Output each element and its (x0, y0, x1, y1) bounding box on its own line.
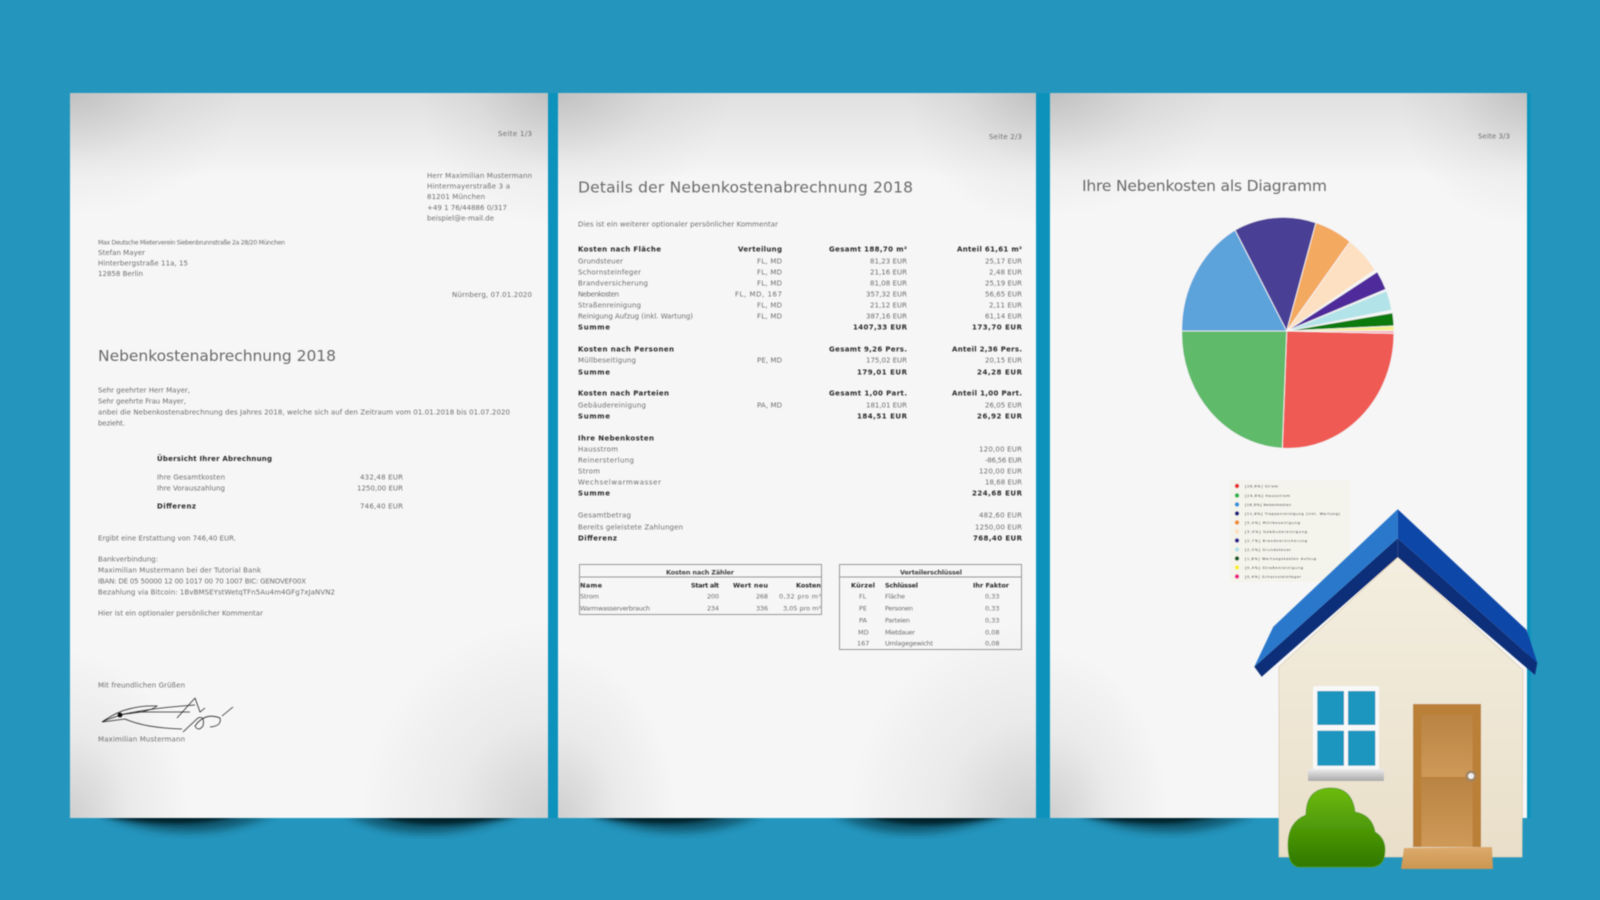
costs by area: Reinigung Aufzug (inkl. Wartung) (578, 312, 693, 320)
costs by parcels: Anteil 1,00 Part. (952, 390, 1022, 398)
your utility costs: 18,68 EUR (985, 478, 1022, 486)
door step (1401, 847, 1493, 869)
your utility costs: Hausstrom (578, 446, 618, 454)
legend: [1,8%] Wartungskosten Aufzug (1245, 557, 1316, 561)
table: costs by meter: 234 (707, 604, 719, 612)
bank details: Ergibt eine Erstattung von 746,40 EUR. (98, 534, 236, 542)
totals: 768,40 EUR (973, 534, 1023, 542)
costs by area: Anteil 61,61 m² (957, 246, 1022, 254)
costs by area: FL, MD, 167 (735, 290, 782, 298)
your utility costs: Strom (578, 468, 600, 476)
costs by area: Straßenreinigung (578, 302, 641, 310)
table: allocation key (839, 564, 1022, 650)
table: costs by meter: Kosten (796, 582, 821, 590)
door (1413, 704, 1481, 847)
your utility costs (578, 434, 1023, 498)
table: costs by meter: Wert neu (733, 582, 768, 590)
legend: [0,4%] Straßenreinigung (1245, 566, 1303, 570)
table: allocation key: 0,08 (985, 640, 999, 648)
costs by area: Schornsteinfeger (578, 268, 641, 276)
costs by parcels: Summe (578, 412, 610, 420)
panel: page 2 details (558, 93, 1036, 818)
your utility costs: 120,00 EUR (979, 468, 1022, 476)
table: costs by meter: Name (580, 582, 603, 590)
costs by area: 2,11 EUR (989, 302, 1022, 310)
sender address: 81201 München (427, 193, 485, 201)
table: allocation key: Ihr Faktor (973, 582, 1010, 590)
sender address: Herr Maximilian Mustermann (427, 172, 532, 180)
page number: Seite 3/3 (1478, 132, 1510, 140)
details title: Details der Nebenkostenabrechnung 2018 (578, 178, 913, 196)
your utility costs: Wechselwarmwasser (578, 478, 661, 486)
table: allocation key: Personen (885, 604, 913, 612)
costs by parcels: 26,05 EUR (985, 402, 1022, 410)
pie slice: light cyan (1287, 291, 1392, 331)
pie chart (1182, 217, 1394, 448)
costs by persons: PE, MD (757, 356, 782, 364)
costs by parcels: 26,92 EUR (977, 412, 1023, 420)
table: costs by meter: Kosten nach Zähler (666, 568, 735, 576)
letter title: Nebenkostenabrechnung 2018 (98, 347, 336, 365)
table: allocation key: Kürzel (851, 582, 875, 590)
legend: [24,6%] Hausstrom (1245, 494, 1290, 498)
table: allocation key: Fläche (885, 592, 905, 600)
costs by parcels: 184,51 EUR (857, 412, 908, 420)
table: allocation key: 167 (857, 640, 869, 648)
recipient address: Hinterbergstraße 11a, 15 (98, 260, 188, 268)
chart title: Ihre Nebenkosten als Diagramm (1082, 177, 1327, 195)
costs by area: 173,70 EUR (972, 324, 1023, 332)
costs by parcels: Gesamt 1,00 Part. (829, 390, 907, 398)
costs by area: Verteilung (738, 246, 782, 254)
pie slice: purple (1287, 272, 1386, 331)
salutation (98, 386, 510, 428)
legend: [2,5%] Grundsteuer (1245, 548, 1292, 552)
bank details: Bankverbindung: (98, 556, 158, 564)
sender address: +49 1 76/44886 0/317 (427, 204, 507, 212)
table: allocation key: MD (858, 628, 869, 636)
your utility costs: Reinersterlung (578, 456, 634, 464)
pie slice: green (1182, 331, 1287, 448)
icon: house (1254, 509, 1537, 869)
costs by area: 2,48 EUR (989, 268, 1022, 276)
costs by area: 21,12 EUR (870, 302, 907, 310)
table: costs by meter: 3,05 pro m³ (783, 604, 821, 612)
costs by parcels: PA, MD (757, 402, 782, 410)
table: allocation key: Parteien (885, 616, 910, 624)
house wall (1279, 557, 1523, 857)
costs by persons: Gesamt 9,26 Pers. (829, 346, 907, 354)
costs by area: Gesamt 188,70 m² (829, 246, 907, 254)
table: allocation key: Schlüssel (885, 582, 918, 590)
icon: signature (102, 698, 233, 732)
roof (1254, 509, 1537, 677)
costs by area: Summe (578, 324, 610, 332)
closing: Mit freundlichen Grüßen (98, 682, 185, 690)
costs by persons (578, 346, 1023, 376)
salutation: Sehr geehrte Frau Mayer, (98, 398, 186, 406)
legend: [0,4%] Schornsteinfeger (1245, 575, 1302, 579)
costs by area: 81,23 EUR (870, 258, 907, 266)
costs by area: 25,17 EUR (985, 258, 1022, 266)
pie slice: orange (1287, 223, 1350, 331)
gutter strips between pages (546, 93, 1531, 818)
table: allocation key: FL (859, 592, 867, 600)
overview summary: 746,40 EUR (360, 502, 403, 510)
table: costs by meter (579, 564, 822, 614)
pie slice: peach (1287, 242, 1375, 331)
pie slice: yellow (1287, 326, 1394, 331)
table: allocation key: PE (859, 604, 867, 612)
panel: page 3 chart (1050, 93, 1527, 818)
table: costs by meter: 268 (756, 592, 768, 600)
bank details: Hier ist ein optionaler persönlicher Kommentar (98, 610, 263, 618)
costs by area: FL, MD (757, 268, 782, 276)
totals (578, 512, 1023, 542)
costs by area: FL, MD (757, 312, 782, 320)
bank details: IBAN: DE 05 50000 12 00 1017 00 70 1007 BIC: GENOVEF00X (98, 578, 306, 586)
table: costs by meter: Start alt (691, 582, 719, 590)
your utility costs: Ihre Nebenkosten (578, 434, 654, 442)
pie slice: red (1282, 331, 1394, 448)
costs by area: Grundsteuer (578, 258, 623, 266)
costs by area: 61,14 EUR (985, 312, 1022, 320)
legend: [5,0%] Gebäudereinigung (1245, 530, 1307, 534)
costs by persons: Müllbeseitigung (578, 356, 636, 364)
overview summary: Ihre Vorauszahlung (157, 484, 225, 492)
table: costs by meter: Warmwasserverbrauch (580, 604, 650, 612)
panel: page 1 letter (70, 93, 548, 818)
details text (578, 133, 1023, 650)
overview summary: Ihre Gesamtkosten (157, 474, 225, 482)
your utility costs: 120,00 EUR (979, 446, 1022, 454)
your utility costs: 224,68 EUR (972, 490, 1023, 498)
page number: Seite 1/3 (498, 130, 532, 138)
table: allocation key: Umlagegewicht (885, 640, 933, 648)
costs by area: 25,19 EUR (985, 280, 1022, 288)
costs by area: 21,16 EUR (870, 268, 907, 276)
sender address (427, 172, 532, 222)
your utility costs: -86,56 EUR (985, 456, 1022, 464)
bank details (98, 534, 335, 618)
icon: bush (1288, 788, 1385, 867)
date: Nürnberg, 07.01.2020 (452, 291, 532, 299)
costs by persons: 20,15 EUR (985, 356, 1022, 364)
costs by area (578, 246, 1023, 332)
table: costs by meter: Strom (580, 592, 599, 600)
costs by parcels: 181,01 EUR (866, 402, 907, 410)
costs by parcels: Kosten nach Parteien (578, 390, 669, 398)
costs by persons: Kosten nach Personen (578, 346, 674, 354)
overview summary: Differenz (157, 502, 196, 510)
legend (1230, 480, 1350, 582)
costs by area: 357,32 EUR (866, 290, 907, 298)
legend: [2,7%] Brandversicherung (1245, 539, 1307, 543)
pie slice: pink (1287, 331, 1394, 333)
costs by persons: Summe (578, 368, 610, 376)
table: allocation key: Mietdauer (885, 628, 915, 636)
pie slice: blue (1182, 230, 1287, 331)
bank details: Bezahlung via Bitcoin: 1BvBMSEYstWetqTFn5Au4m4GFg7xJaNVN2 (98, 588, 335, 596)
overview summary: 1250,00 EUR (357, 484, 403, 492)
costs by area: Brandversicherung (578, 280, 648, 288)
sender address: Hintermayerstraße 3 a (427, 182, 510, 190)
recipient address: Stefan Mayer (98, 249, 145, 257)
totals: Differenz (578, 534, 617, 542)
pie slice: navy (1235, 217, 1316, 331)
costs by parcels: Gebäudereinigung (578, 402, 646, 410)
table: allocation key: 0,08 (985, 628, 999, 636)
salutation: Sehr geehrter Herr Mayer, (98, 386, 190, 394)
overview summary: Übersicht Ihrer Abrechnung (157, 454, 272, 463)
pie slice: dark green (1287, 313, 1394, 331)
recipient address: 12858 Berlin (98, 270, 143, 278)
costs by area: FL, MD (757, 258, 782, 266)
recipient address: Max Deutsche Mieterverein Siebenbrunnstraße 2a 28/20 München (98, 240, 285, 246)
table: costs by meter: 336 (756, 604, 768, 612)
signature name: Maximilian Mustermann (98, 736, 185, 744)
page shadows (98, 814, 1255, 833)
table: allocation key: 0,33 (985, 616, 999, 624)
overview summary: 432,48 EUR (360, 474, 403, 482)
table: costs by meter: 200 (707, 592, 719, 600)
letter text (98, 130, 532, 744)
sender address: beispiel@e-mail.de (427, 214, 494, 222)
costs by area: FL, MD (757, 302, 782, 310)
costs by parcels (578, 390, 1023, 420)
table: costs by meter: 0,32 pro m³ (779, 592, 821, 600)
costs by persons: 179,01 EUR (857, 368, 908, 376)
table: allocation key: PA (859, 616, 868, 624)
costs by area: 56,65 EUR (985, 290, 1022, 298)
bank details: Maximilian Mustermann bei der Tutorial Bank (98, 566, 262, 574)
recipient address (98, 240, 285, 278)
costs by area: FL, MD (757, 280, 782, 288)
table: allocation key: 0,33 (985, 604, 999, 612)
legend: [16,6%] Nebenkosten (1245, 503, 1291, 507)
page number: Seite 2/3 (989, 133, 1022, 141)
salutation: anbei die Nebenkostenabrechnung des Jahres 2018, welche sich auf den Zeitraum vom 01.01.2018 bis 01.07.2020 (98, 408, 510, 416)
legend: [5,0%] Müllbeseitigung (1245, 521, 1300, 525)
legend: [26,6%] Strom (1245, 484, 1278, 488)
salutation: bezieht. (98, 420, 125, 428)
your utility costs: Summe (578, 490, 610, 498)
costs by persons: Anteil 2,36 Pers. (952, 346, 1022, 354)
costs by persons: 24,28 EUR (977, 368, 1023, 376)
legend: [11,8%] Treppenreinigung (inkl. Wartung) (1245, 512, 1341, 516)
table: allocation key: Verteilerschlüssel (900, 568, 962, 576)
totals: 1250,00 EUR (975, 524, 1022, 532)
costs by area: Nebenkosten (578, 290, 619, 298)
totals: 482,60 EUR (979, 512, 1022, 520)
overview summary (157, 454, 403, 510)
chart page text (1082, 132, 1510, 195)
table: allocation key: 0,33 (985, 592, 999, 600)
comment line: Dies ist ein weiterer optionaler persönlicher Kommentar (578, 220, 778, 228)
totals: Bereits geleistete Zahlungen (578, 524, 683, 532)
costs by area: Kosten nach Fläche (578, 246, 661, 254)
costs by persons: 175,02 EUR (866, 356, 907, 364)
costs by area: 387,16 EUR (866, 312, 907, 320)
costs by area: 81,08 EUR (870, 280, 907, 288)
costs by area: 1407,33 EUR (853, 324, 908, 332)
window (1308, 686, 1384, 781)
totals: Gesamtbetrag (578, 512, 631, 520)
